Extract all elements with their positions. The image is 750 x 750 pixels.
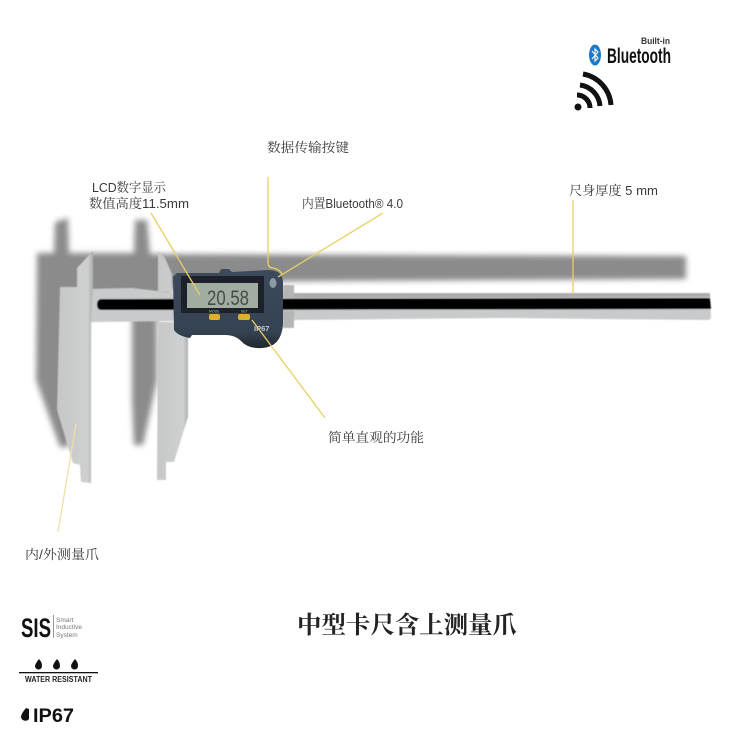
button: data (238, 310, 250, 320)
logo: SIS: Inductive (56, 624, 82, 631)
dark LCD frame (181, 276, 264, 313)
label: LCD display (89, 180, 189, 211)
beam (88, 288, 711, 322)
bluetooth logo (589, 36, 671, 68)
icon: wireless signal (574, 74, 611, 110)
label: built-in bluetooth: 内置Bluetooth® 4.0 (302, 196, 403, 211)
bluetooth logo: Bluetooth (607, 45, 671, 68)
logo: IP67: IP67 (33, 706, 74, 727)
logo: SIS: Smart (56, 617, 74, 624)
caliper drop shadow (36, 218, 686, 447)
slider ears (283, 285, 294, 328)
LCD reading: 20.58 (207, 287, 249, 310)
logo: water resistant (19, 659, 98, 684)
bluetooth logo: Built-in (641, 36, 670, 46)
LCD screen (187, 283, 258, 308)
button: mode: MODE (209, 310, 220, 314)
logo: water resistant: WATER RESISTANT (25, 675, 92, 684)
logo: SIS: System (56, 632, 78, 639)
label: inner outer jaws: 内/外测量爪 (25, 547, 99, 562)
label: LCD display: LCD数字显示 (92, 180, 167, 195)
title: 中型卡尺含上测量爪 (297, 612, 517, 639)
caliper (57, 251, 711, 483)
logo: SIS: SIS (21, 613, 51, 643)
label: LCD display: 数值高度11.5mm (89, 196, 189, 211)
label: body thickness: 尺身厚度 5 mm (569, 183, 658, 198)
label: data transfer button: 数据传输按键 (267, 140, 349, 155)
small bluetooth badge (270, 278, 276, 288)
button: data: SET (241, 310, 249, 314)
digital readout body (173, 269, 283, 348)
leader lines (58, 177, 573, 532)
button: mode (209, 310, 220, 320)
ip67 body mark: IP67 (254, 324, 269, 333)
outer and inner jaw: fixed (57, 251, 93, 483)
outer and inner jaw: sliding (157, 251, 188, 480)
label: simple functions: 简单直观的功能 (328, 430, 424, 445)
